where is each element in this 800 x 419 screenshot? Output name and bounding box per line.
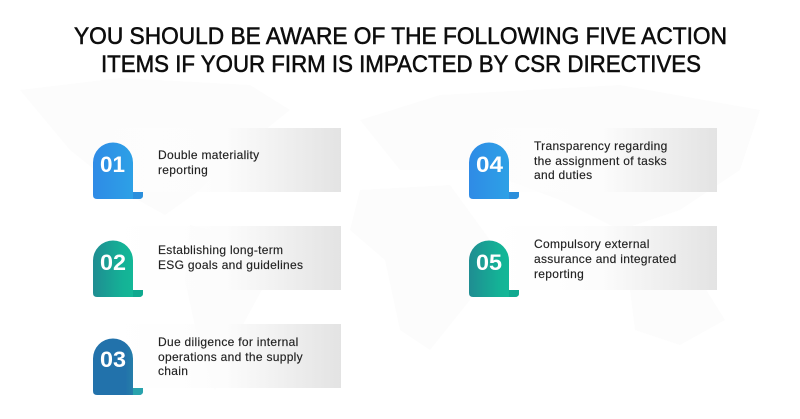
badge 01: 01 [100, 152, 125, 177]
badge 05: 05 [476, 250, 502, 275]
item 03 [84, 324, 341, 395]
label 05: assurance and integrated [534, 252, 677, 266]
label 03: chain [158, 364, 188, 378]
label 05: reporting [534, 267, 584, 281]
label 04: the assignment of tasks [534, 154, 667, 168]
label 03: operations and the supply [158, 350, 303, 364]
title: YOU SHOULD BE AWARE OF THE FOLLOWING FIVE ACTION [74, 23, 727, 50]
title: ITEMS IF YOUR FIRM IS IMPACTED BY CSR DIRECTIVES [101, 51, 701, 78]
badge 03: 03 [100, 347, 126, 372]
badge 04: 04 [476, 152, 504, 177]
item 05 [460, 226, 717, 297]
badge 01 [93, 142, 143, 199]
background world map [20, 78, 760, 390]
label 02: Establishing long-term [158, 243, 283, 257]
card background 04 [460, 128, 717, 192]
item 04 [460, 128, 717, 199]
title [74, 23, 727, 78]
label 05: Compulsory external [534, 237, 650, 251]
badge 05 [469, 241, 519, 297]
card background 01 [84, 128, 341, 192]
card background 03 [84, 324, 341, 388]
item 01 [84, 128, 341, 199]
label 04: Transparency regarding [534, 139, 668, 153]
label 01: Double materiality [158, 148, 259, 162]
card background 05 [460, 226, 717, 290]
label 01: reporting [158, 163, 208, 177]
card background 02 [84, 226, 341, 290]
label 04: and duties [534, 168, 592, 182]
item 02 [84, 226, 341, 297]
badge 03 [93, 339, 143, 395]
label 02: ESG goals and guidelines [158, 258, 303, 272]
badge 02 [93, 241, 143, 297]
badge 02: 02 [100, 250, 126, 275]
badge 04 [469, 142, 519, 199]
label 03: Due diligence for internal [158, 335, 299, 349]
